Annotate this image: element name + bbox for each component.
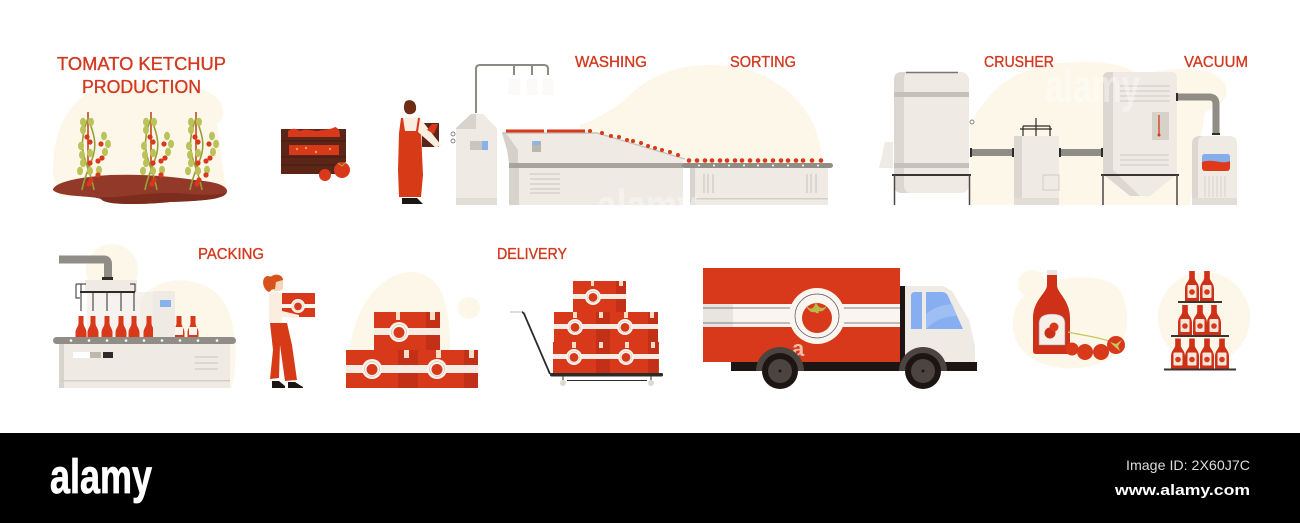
icon: delivery truck <box>703 268 977 389</box>
panel: tomato plants on soil <box>53 83 227 204</box>
heading: washing: WASHING <box>575 54 647 71</box>
panel: washing machine <box>451 65 554 205</box>
panel: crusher unit <box>971 118 1102 205</box>
text: url: www.alamy.com <box>1114 482 1250 499</box>
heading: delivery: DELIVERY <box>497 246 567 263</box>
icon: shelf of ketchup bottles <box>1158 271 1250 370</box>
watermark: faint alamy marks: alamy <box>1045 60 1140 112</box>
icon: woman carrying box <box>263 275 315 388</box>
watermark: faint alamy marks <box>597 60 1140 232</box>
heading: sorting: SORTING <box>730 54 796 71</box>
icon: worker in overalls <box>398 100 441 204</box>
icon: crate of tomatoes <box>281 127 350 181</box>
heading: vacuum: VACUUM <box>1184 54 1248 71</box>
icon: delivery truck: a <box>792 336 805 361</box>
heading: crusher: CRUSHER <box>984 54 1054 71</box>
heading: title: PRODUCTION <box>82 77 201 97</box>
heading: title: TOMATO KETCHUP <box>57 54 226 74</box>
panel: sorting conveyor <box>682 158 833 205</box>
panel: cream backdrop behind crusher <box>970 62 1227 205</box>
heading: title <box>57 54 226 97</box>
panel: bottling line <box>53 244 236 388</box>
icon: cart with boxes <box>510 281 663 386</box>
watermark: faint alamy marks: alamy <box>597 180 697 232</box>
panel: big cream backdrop behind sorting <box>580 65 822 165</box>
icon: ketchup bottle with tomatoes <box>1013 270 1127 368</box>
heading: packing: PACKING <box>198 246 264 263</box>
panel: vacuum unit <box>1177 93 1237 205</box>
icon: stacked boxes <box>346 272 480 388</box>
text: image id: Image ID: 2X60J7C <box>1126 457 1250 473</box>
panel: washing line <box>502 129 685 205</box>
panel: crusher tank <box>879 72 974 205</box>
logo: alamy: alamy <box>50 451 152 504</box>
panel: cooking vessel <box>1101 72 1179 205</box>
footer: black banner <box>0 433 1300 523</box>
